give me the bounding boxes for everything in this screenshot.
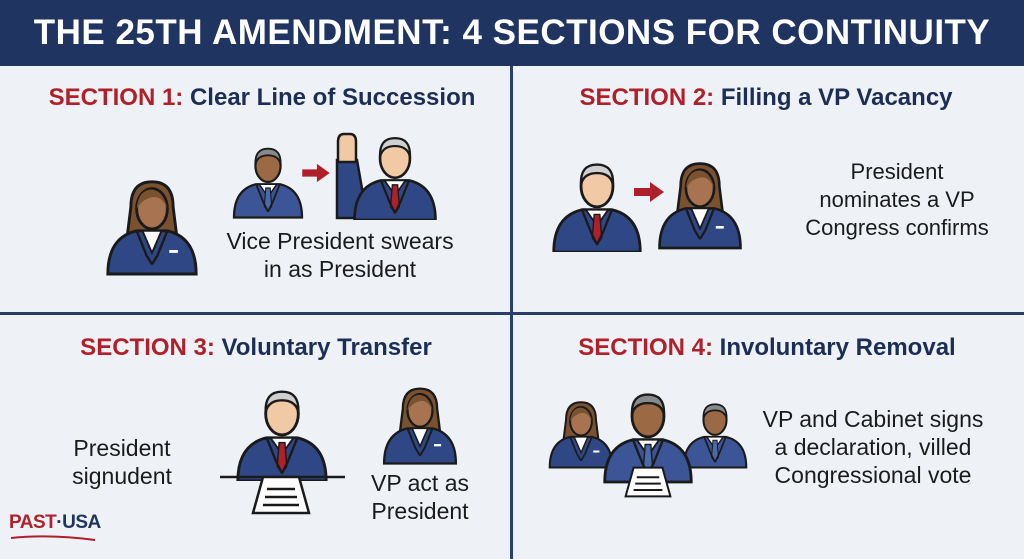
text section 3 left: signudent <box>72 463 172 489</box>
text section 3 left: President <box>73 435 171 461</box>
text section 4 <box>762 406 983 488</box>
text section 1: in as President <box>264 256 416 282</box>
text section 1 <box>226 228 454 282</box>
text section 1: Vice President swears <box>226 228 454 254</box>
text section 2: Congress confirms <box>805 215 989 240</box>
heading section 4: SECTION 4: Involuntary Removal <box>578 334 956 361</box>
arrow 2 <box>634 182 664 202</box>
icon: cabinet group <box>550 395 746 496</box>
title bar <box>0 0 1024 66</box>
icon: president signing <box>220 392 345 513</box>
title bar: THE 25TH AMENDMENT: 4 SECTIONS FOR CONTINUITY <box>34 13 990 52</box>
logo: PAST·USA <box>9 512 101 533</box>
heading section 3: SECTION 3: Voluntary Transfer <box>80 334 432 361</box>
text section 4: VP and Cabinet signs <box>763 406 983 432</box>
text section 4: a declaration, villed <box>775 434 971 460</box>
icon: woman panel 2 <box>660 164 740 248</box>
text section 3 left <box>72 435 172 489</box>
arrow 1 <box>302 164 330 182</box>
icon: VP woman panel 3 <box>384 389 456 464</box>
heading section 1: SECTION 1: Clear Line of Succession <box>49 84 475 111</box>
icon: VP man small <box>234 149 302 218</box>
text section 2: nominates a VP <box>819 187 975 212</box>
icon: president panel 2 <box>554 165 640 252</box>
heading section 2: SECTION 2: Filling a VP Vacancy <box>579 84 953 111</box>
text section 2 <box>805 159 989 240</box>
text section 3 right <box>371 470 469 524</box>
icon: man raising hand <box>337 134 435 220</box>
icon: VP woman panel 1 <box>108 182 196 274</box>
text section 4: Congressional vote <box>775 462 971 488</box>
text section 3 right: VP act as <box>371 470 469 496</box>
text section 2: President <box>851 159 943 184</box>
text section 3 right: President <box>371 498 469 524</box>
